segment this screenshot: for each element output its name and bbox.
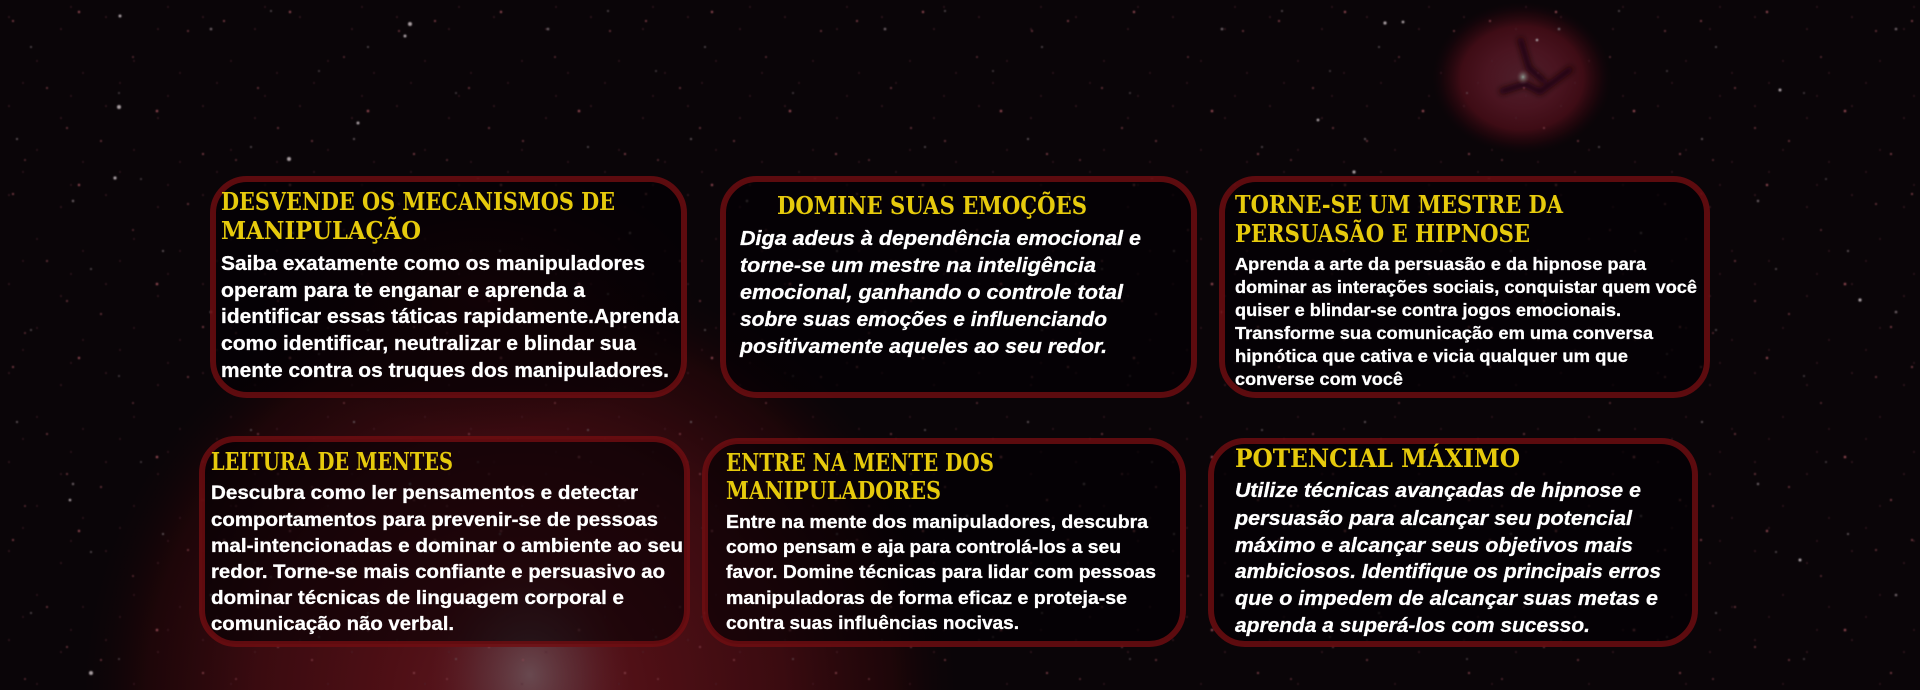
text block: como identificar, neutralizar e blindar sua xyxy=(221,333,637,355)
heading: LEITURA DE MENTES xyxy=(211,447,453,476)
heading: DOMINE SUAS EMOÇÕES xyxy=(777,191,1087,220)
text block: dominar técnicas de linguagem corporal e xyxy=(211,588,624,609)
text block: que o impedem de alcançar suas metas e xyxy=(1235,588,1658,610)
heading: ENTRE NA MENTE DOS xyxy=(726,448,994,477)
text block: favor. Domine técnicas para lidar com pessoas xyxy=(726,562,1156,582)
text block: manipuladoras de forma eficaz e proteja-se xyxy=(726,588,1127,608)
text block: redor. Torne-se mais confiante e persuasivo ao xyxy=(211,562,665,583)
panel: torne-se um mestre xyxy=(1222,179,1707,395)
nebula: top right xyxy=(1430,0,1614,156)
text block: aprenda a superá-los com sucesso. xyxy=(1235,615,1590,637)
text block: mente contra os truques dos manipuladores. xyxy=(221,360,669,382)
text block: Aprenda a arte da persuasão e da hipnose para xyxy=(1235,254,1646,274)
text block: quiser e blindar-se contra jogos emocionais. xyxy=(1235,300,1621,320)
panel: domine suas emoções xyxy=(723,179,1194,395)
text block: sobre suas emoções e influenciando xyxy=(740,309,1107,331)
text block: emocional, ganhando o controle total xyxy=(740,282,1123,304)
heading: DESVENDE OS MECANISMOS DE xyxy=(221,187,615,216)
panel: entre na mente dos manipuladores xyxy=(705,441,1183,644)
text block: máximo e alcançar seus objetivos mais xyxy=(1235,535,1633,557)
text block: Entre na mente dos manipuladores, descubra xyxy=(726,512,1149,532)
text block: dominar as interações sociais, conquistar quem você xyxy=(1235,277,1697,297)
heading: PERSUASÃO E HIPNOSE xyxy=(1235,219,1530,248)
text block: Saiba exatamente como os manipuladores xyxy=(221,253,645,275)
text block: Utilize técnicas avançadas de hipnose e xyxy=(1235,480,1641,502)
panel: desvende os mecanismos xyxy=(213,179,684,395)
heading: MANIPULAÇÃO xyxy=(221,216,421,245)
text block: contra suas influências nocivas. xyxy=(726,613,1019,633)
text block: identificar essas táticas rapidamente.Aprenda xyxy=(221,306,680,328)
text block: hipnótica que cativa e vicia qualquer um que xyxy=(1235,346,1628,366)
panel: leitura de mentes xyxy=(202,439,687,644)
heading: TORNE-SE UM MESTRE DA xyxy=(1235,190,1563,219)
text block: converse com você xyxy=(1235,369,1403,389)
heading: MANIPULADORES xyxy=(726,476,941,505)
text block: comunicação não verbal. xyxy=(211,614,454,635)
text block: como pensam e aja para controlá-los a seu xyxy=(726,537,1121,557)
text block: comportamentos para prevenir-se de pessoas xyxy=(211,510,658,531)
text block: Diga adeus à dependência emocional e xyxy=(740,228,1141,250)
heading: POTENCIAL MÁXIMO xyxy=(1235,444,1520,473)
panel: potencial máximo xyxy=(1211,441,1695,644)
text block: Descubra como ler pensamentos e detectar xyxy=(211,483,639,504)
text block: ambiciosos. Identifique os principais erros xyxy=(1235,561,1661,583)
text block: mal-intencionadas e dominar o ambiente ao seu xyxy=(211,536,683,557)
text block: persuasão para alcançar seu potencial xyxy=(1234,508,1632,530)
nebula: bottom left xyxy=(80,160,960,690)
text block: torne-se um mestre na inteligência xyxy=(740,255,1096,277)
text block: Transforme sua comunicação em uma conversa xyxy=(1235,323,1653,343)
text block: positivamente aqueles ao seu redor. xyxy=(739,336,1107,358)
text block: operam para te enganar e aprenda a xyxy=(221,280,586,302)
